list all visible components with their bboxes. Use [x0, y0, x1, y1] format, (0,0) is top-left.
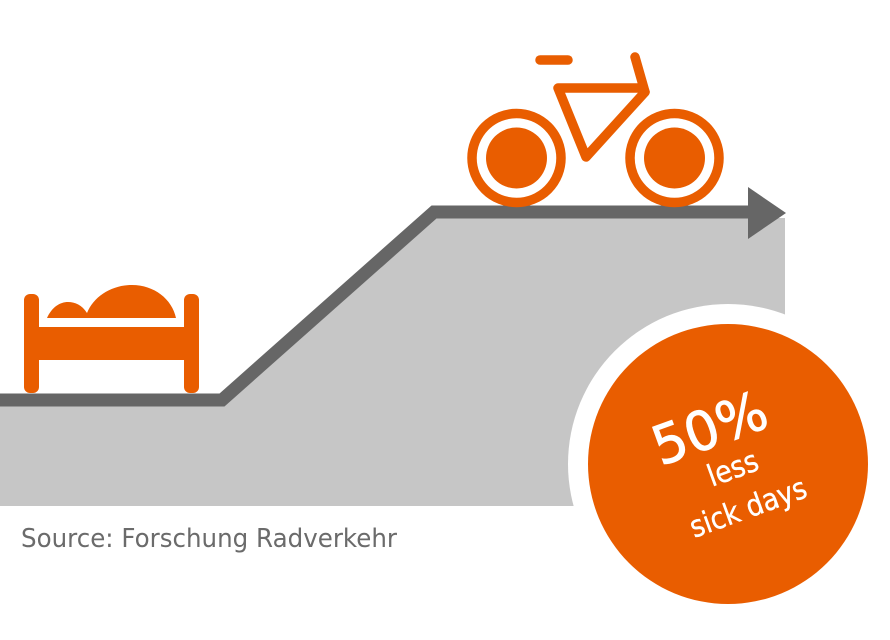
source text: Source: Forschung Radverkehr: [21, 524, 397, 554]
callout: 50% less sick days: [568, 304, 888, 624]
stat label line 1: less: [703, 444, 763, 494]
path line with arrow: [0, 187, 786, 400]
stat label line 2: sick days: [685, 471, 812, 546]
stat number: 50%: [644, 379, 776, 478]
grey elevation area: [0, 218, 785, 506]
icon: bed: [24, 285, 199, 393]
icon: bicycle: [472, 57, 719, 202]
